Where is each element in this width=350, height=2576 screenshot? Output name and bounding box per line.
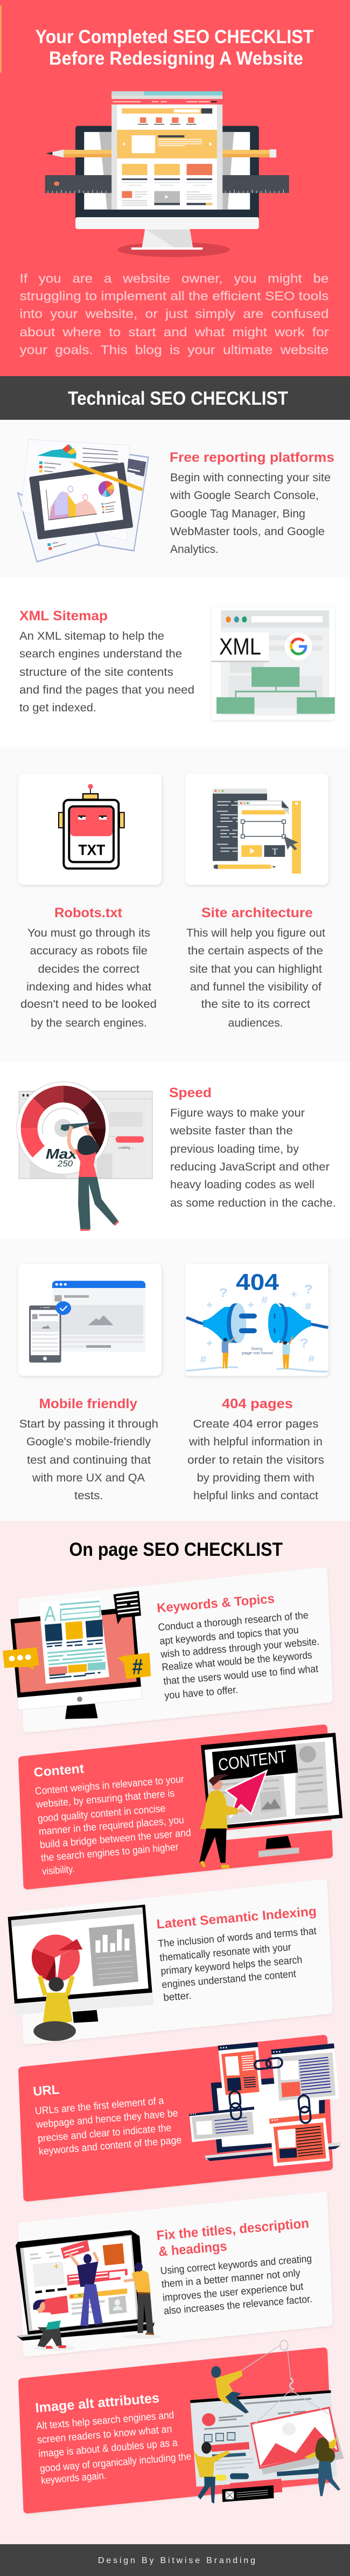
body text: the site to its correct	[201, 998, 310, 1010]
card: 404 illustration: #	[308, 1353, 314, 1365]
card: URL	[22, 2039, 341, 2198]
intro paragraph: your goals. This blog is your ultimate website	[19, 343, 328, 357]
body text	[36, 2409, 192, 2487]
card: 404 illustration: +	[291, 1289, 297, 1300]
body text: doesn't need to be looked	[20, 998, 157, 1010]
body text: search engines understand the	[19, 648, 182, 660]
body text	[170, 472, 331, 556]
card: robot illustration: TXT	[78, 842, 105, 858]
body text: Using correct keywords and creating	[160, 2253, 312, 2277]
heading: Latent Semantic Indexing	[156, 1904, 317, 1932]
body text: An XML sitemap to help the	[19, 630, 164, 642]
body text	[34, 1774, 192, 1878]
body text: engines understand the content	[162, 1969, 297, 1991]
body text: improves the user experience but	[162, 2281, 304, 2304]
body text: Begin with connecting your site	[170, 472, 331, 484]
card: 404 illustration: #	[261, 1294, 268, 1306]
body text	[19, 630, 194, 714]
heading: Speed	[169, 1085, 212, 1100]
illustration: tablet with reports	[18, 439, 149, 562]
body text	[160, 2253, 313, 2317]
heading: Free reporting platforms	[170, 450, 334, 465]
card: 404 illustration: #	[305, 1301, 311, 1312]
body text: manner in the required places, you	[38, 1815, 185, 1838]
body text	[19, 1418, 158, 1502]
body text: webpage and hence they have be	[35, 2108, 178, 2131]
body text	[158, 1610, 320, 1702]
body text: also increases the relevance factor.	[163, 2294, 313, 2317]
body text: audiences.	[228, 1017, 283, 1029]
body text: URLs are the first element of a	[34, 2095, 165, 2117]
illustration: monitor with keyword document	[3, 1591, 151, 1719]
panel: free reporting platforms	[18, 439, 334, 562]
illustration: speed gauge and woman: Loading ...	[118, 1146, 134, 1150]
illustration: monitor with website wireframe, pencil and ruler	[45, 91, 289, 257]
body text: them in a better manner not only	[161, 2268, 301, 2290]
illustration: laptop with people fixing headings: +	[54, 2261, 59, 2272]
heading: Robots.txt	[54, 905, 123, 920]
body text: tests.	[74, 1490, 103, 1502]
body text: Figure ways to make your	[170, 1107, 305, 1119]
body text: you have to offer.	[164, 1684, 239, 1702]
body text: accuracy as robots file	[30, 945, 148, 957]
card: 404 illustration: Sorry,	[251, 1346, 263, 1351]
body text: screen readers to know what an	[37, 2423, 172, 2446]
heading: Technical SEO CHECKLIST	[0, 376, 350, 420]
card: latent semantic indexing	[8, 1883, 329, 2041]
body text: order to retain the visitors	[187, 1454, 324, 1466]
card: 404 illustration: +	[206, 1299, 213, 1311]
panel: hero	[0, 0, 350, 376]
illustration: content monitor and person	[199, 1733, 344, 1868]
heading	[156, 2216, 310, 2259]
body text: keywords again.	[40, 2470, 107, 2487]
body text: that the users would use to find what	[163, 1663, 319, 1687]
body text: Start by passing it through	[19, 1418, 158, 1430]
body text: website, by ensuring that there is	[35, 1788, 175, 1811]
body text: good way of organically including the	[39, 2451, 192, 2475]
title	[36, 26, 313, 69]
card: 404 illustration: page not found	[242, 1351, 273, 1355]
illustration: monitor with keyword document: #	[132, 1654, 143, 1679]
body text: Google Tag Manager, Bing	[170, 508, 305, 520]
body text: keywords and content of the page	[38, 2135, 182, 2157]
body text: with helpful information in	[188, 1436, 323, 1448]
body text: better.	[163, 1990, 192, 2004]
body text: previous loading time, by	[170, 1143, 299, 1155]
illustration: people hanging an image on browser	[190, 2340, 344, 2504]
panel: mobile friendly	[18, 1264, 162, 1502]
body text: image is about & doubles up as a	[38, 2437, 178, 2460]
card: fix the titles, description and headings	[16, 2196, 329, 2353]
intro paragraph: If you are a website owner, you might be	[19, 272, 328, 286]
heading: URL	[32, 2082, 60, 2099]
body text: Alt texts help search engines and	[36, 2409, 174, 2432]
panel: site architecture	[185, 773, 328, 1029]
body text: Realize what would be the keywords	[162, 1650, 312, 1673]
panel: on page section background	[0, 1521, 350, 2544]
illustration: XML sitemap browser	[212, 607, 335, 720]
body text	[34, 2095, 182, 2157]
card: image alt attributes	[22, 2340, 344, 2510]
heading: Keywords & Topics	[156, 1591, 275, 1616]
body text: helpful links and contact	[193, 1490, 318, 1502]
body text: test and continuing that	[27, 1454, 151, 1466]
heading: 404 pages	[222, 1396, 293, 1411]
card: content	[22, 1728, 344, 1886]
body text: the certain aspects of the	[188, 945, 323, 957]
illustration: speed gauge and woman	[17, 1082, 152, 1231]
intro paragraph: into your website, or just simply are confused	[19, 307, 328, 321]
body text: and funnel the visibility of	[190, 981, 321, 993]
illustration: speed gauge and woman: 250	[57, 1159, 73, 1168]
body text: site that you can highlight	[190, 963, 322, 975]
body text: structure of the site contents	[19, 666, 173, 678]
heading: Image alt attributes	[34, 2391, 160, 2415]
body text: with more UX and QA	[32, 1472, 145, 1484]
panel: white band backgrounds	[0, 577, 350, 1238]
body text: wish to address through your website.	[160, 1636, 320, 1660]
card: robot illustration	[18, 773, 162, 885]
intro paragraph	[19, 272, 329, 357]
body text: Analytics.	[170, 543, 219, 556]
illustration: speed gauge and woman: Max	[46, 1146, 78, 1161]
illustration: monitor, pie chart and person	[8, 1905, 153, 2041]
footer	[0, 2544, 350, 2576]
body text: by the search engines.	[31, 1017, 147, 1029]
card: keywords and topics	[3, 1571, 329, 1729]
body text: Conduct a thorough research of the	[158, 1610, 309, 1633]
body text: Content weighs in relevance to your	[34, 1774, 185, 1797]
illustration: monitor with keyword document: A	[44, 1602, 56, 1626]
body text: build a bridge between the user and	[39, 1827, 192, 1851]
body text: indexing and hides what	[26, 981, 151, 993]
card: mobile illustration	[18, 1264, 162, 1376]
title: Before Redesigning A Website	[49, 48, 303, 69]
body text: heavy loading codes as well	[170, 1179, 314, 1191]
body text: This will help you figure out	[186, 927, 325, 939]
illustration: XML sitemap browser: XML	[219, 634, 261, 660]
body text: precise and clear to indicate the	[37, 2122, 172, 2144]
illustration: content monitor and person: CONTENT	[218, 1747, 288, 1775]
panel: xml sitemap	[19, 607, 335, 720]
heading: XML Sitemap	[19, 608, 108, 624]
body text	[158, 1926, 317, 2004]
body text: reducing JavaScript and other	[170, 1161, 330, 1173]
body text: to get indexed.	[19, 702, 96, 714]
body text: Google's mobile-friendly	[26, 1436, 151, 1448]
card: 404 illustration: ?	[219, 1286, 228, 1300]
card: 404 illustration: +	[248, 1299, 254, 1311]
body text: primary keyword helps the search	[160, 1954, 303, 1977]
card: 404 illustration: #	[200, 1354, 206, 1365]
heading: Site architecture	[201, 905, 313, 920]
heading: Content	[33, 1761, 85, 1780]
body text: website faster than the	[170, 1125, 293, 1137]
panel: robots.txt	[18, 773, 162, 1029]
body text	[186, 927, 325, 1029]
card: 404 illustration	[185, 1264, 328, 1376]
heading: Technical SEO CHECKLIST: Technical SEO CHECKLIST	[68, 388, 288, 409]
panel: 404 pages	[185, 1264, 328, 1502]
card: 404 illustration: 404	[236, 1269, 279, 1295]
body text	[187, 1418, 324, 1502]
body text: thematically resonate with your	[159, 1942, 292, 1964]
title: Your Completed SEO CHECKLIST	[36, 26, 313, 47]
heading: Fix the titles, description	[156, 2216, 310, 2243]
card: 404 illustration: +	[206, 1338, 213, 1349]
heading: & headings	[158, 2239, 228, 2259]
panel: speed	[17, 1082, 336, 1231]
illustration: laptop with people fixing headings	[16, 2230, 160, 2351]
footer: Design By Bitwise Branding	[98, 2556, 256, 2565]
card: site architecture illustration: T	[272, 847, 278, 857]
body text	[20, 927, 157, 1029]
body text: WebMaster tools, and Google	[170, 525, 325, 538]
body text: The inclusion of words and terms that	[158, 1926, 317, 1950]
heading: Mobile friendly	[39, 1396, 137, 1411]
body text: the search engines to gain higher	[40, 1841, 179, 1864]
card: 404 illustration: ?	[304, 1282, 313, 1297]
card: 404 illustration: ?	[300, 1336, 309, 1351]
body text: by providing them with	[197, 1472, 314, 1484]
body text	[170, 1107, 336, 1209]
body text: and find the pages that you need	[19, 684, 194, 696]
body text: You must go through its	[27, 927, 150, 939]
intro paragraph: about where to start and what might work for	[19, 325, 329, 339]
body text: good quality content in concise	[37, 1803, 166, 1825]
body text: decides the correct	[38, 963, 139, 975]
intro paragraph: struggling to implement all the efficient SEO tools	[19, 289, 328, 303]
body text: as some reduction in the cache.	[170, 1197, 336, 1209]
body text: apt keywords and topics that you	[159, 1624, 299, 1647]
body text: with Google Search Console,	[170, 489, 319, 502]
body text: Create 404 error pages	[193, 1418, 319, 1430]
body text: visibility.	[41, 1864, 75, 1878]
card: site architecture illustration	[185, 773, 328, 885]
heading: On page SEO CHECKLIST: On page SEO CHECKLIST	[69, 1539, 283, 1560]
illustration: linked web pages on laptop	[189, 2042, 341, 2166]
